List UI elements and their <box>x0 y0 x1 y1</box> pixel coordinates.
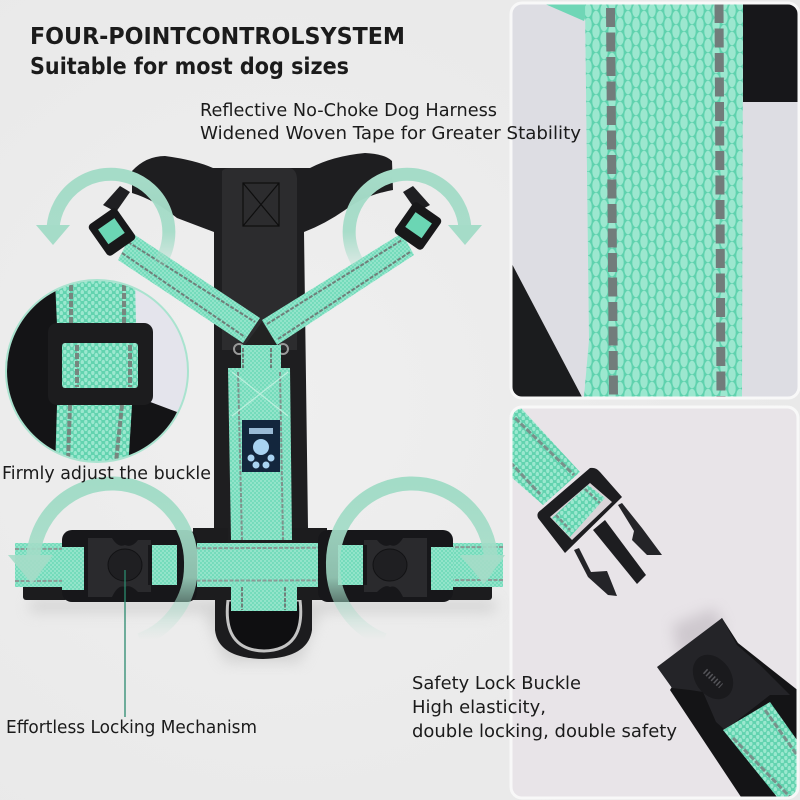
left backing <box>62 530 197 602</box>
center prong <box>593 520 646 584</box>
panel: buckle close-up <box>510 408 800 800</box>
right inner straps <box>431 547 453 590</box>
arrow: lower right rotate <box>333 483 505 640</box>
belt stitching <box>15 547 503 581</box>
text: webbing description <box>200 100 581 144</box>
reflective stitch left <box>610 8 614 397</box>
strap junction <box>245 322 277 345</box>
center belt shoulders <box>193 528 327 600</box>
text: webbing description: Widened Woven Tape for Greater Stability <box>200 123 581 144</box>
left waist buckle assembly <box>62 530 197 602</box>
left side-release buckle <box>88 538 151 597</box>
upper prong <box>618 503 662 555</box>
brand label <box>242 420 280 472</box>
closed buckle <box>657 618 790 730</box>
reflective stitch right <box>719 4 721 397</box>
strap in inset <box>55 280 136 325</box>
right slide buckle <box>393 201 443 251</box>
right strap <box>262 233 414 345</box>
lower prong <box>574 548 617 596</box>
upper strap tail left <box>103 186 130 212</box>
title: FOUR-POINTCONTROLSYSTEM <box>30 24 405 50</box>
O-rings <box>234 344 288 354</box>
panel border: buckle close-up <box>511 407 798 798</box>
title <box>30 24 405 80</box>
chest strap <box>241 345 281 371</box>
right backing <box>318 530 453 602</box>
black back padding <box>132 153 393 600</box>
upper strap tail right <box>403 186 430 212</box>
text: locking mechanism caption: Effortless Locking Mechanism <box>6 717 257 738</box>
arrow: lower left rotate <box>8 483 191 640</box>
green strap remnant at top <box>546 4 586 21</box>
teal webbing strap <box>584 4 743 397</box>
text: safety lock description: Safety Lock Buckle <box>412 673 581 694</box>
arrow: upper right rotate <box>349 174 482 263</box>
text: webbing description: Reflective No-Choke Dog Harness <box>200 100 497 121</box>
teal strap upper <box>510 408 580 505</box>
left slide buckle <box>87 207 137 257</box>
neck straps <box>118 233 414 345</box>
text: safety lock description <box>412 673 677 742</box>
left lock button <box>108 549 142 581</box>
callout leader line <box>124 570 126 717</box>
arrow: upper left rotate <box>36 174 169 263</box>
title: Suitable for most dog sizes <box>30 54 349 80</box>
center back panel <box>222 168 297 350</box>
harness shadow <box>30 600 495 662</box>
shadow under lower buckle <box>671 608 724 652</box>
panel: webbing close-up <box>512 4 799 397</box>
belt end black backing <box>23 582 492 600</box>
waist belt <box>15 543 503 587</box>
lower black padding <box>670 618 800 800</box>
left inner straps <box>62 547 84 590</box>
open side-release buckle <box>537 468 662 596</box>
black padding top right <box>743 4 799 102</box>
D-ring tab <box>215 587 312 659</box>
X-stitched patch <box>243 183 279 226</box>
text: buckle adjust caption: Firmly adjust the buckle <box>2 463 211 484</box>
black padding lower left <box>512 264 582 397</box>
harness product <box>15 153 503 662</box>
text: safety lock description: High elasticity, <box>412 697 546 718</box>
right side-release buckle <box>364 538 427 597</box>
panel border: webbing close-up <box>511 3 799 398</box>
text: safety lock description: double locking, double safety <box>412 721 677 742</box>
left strap <box>118 233 260 343</box>
slide buckle in inset <box>48 323 153 405</box>
inset circle: slide buckle detail <box>0 280 188 470</box>
teal strap lower <box>723 702 797 797</box>
right lock button <box>373 549 407 581</box>
black padding in inset <box>7 290 177 456</box>
right waist buckle assembly <box>318 530 453 602</box>
